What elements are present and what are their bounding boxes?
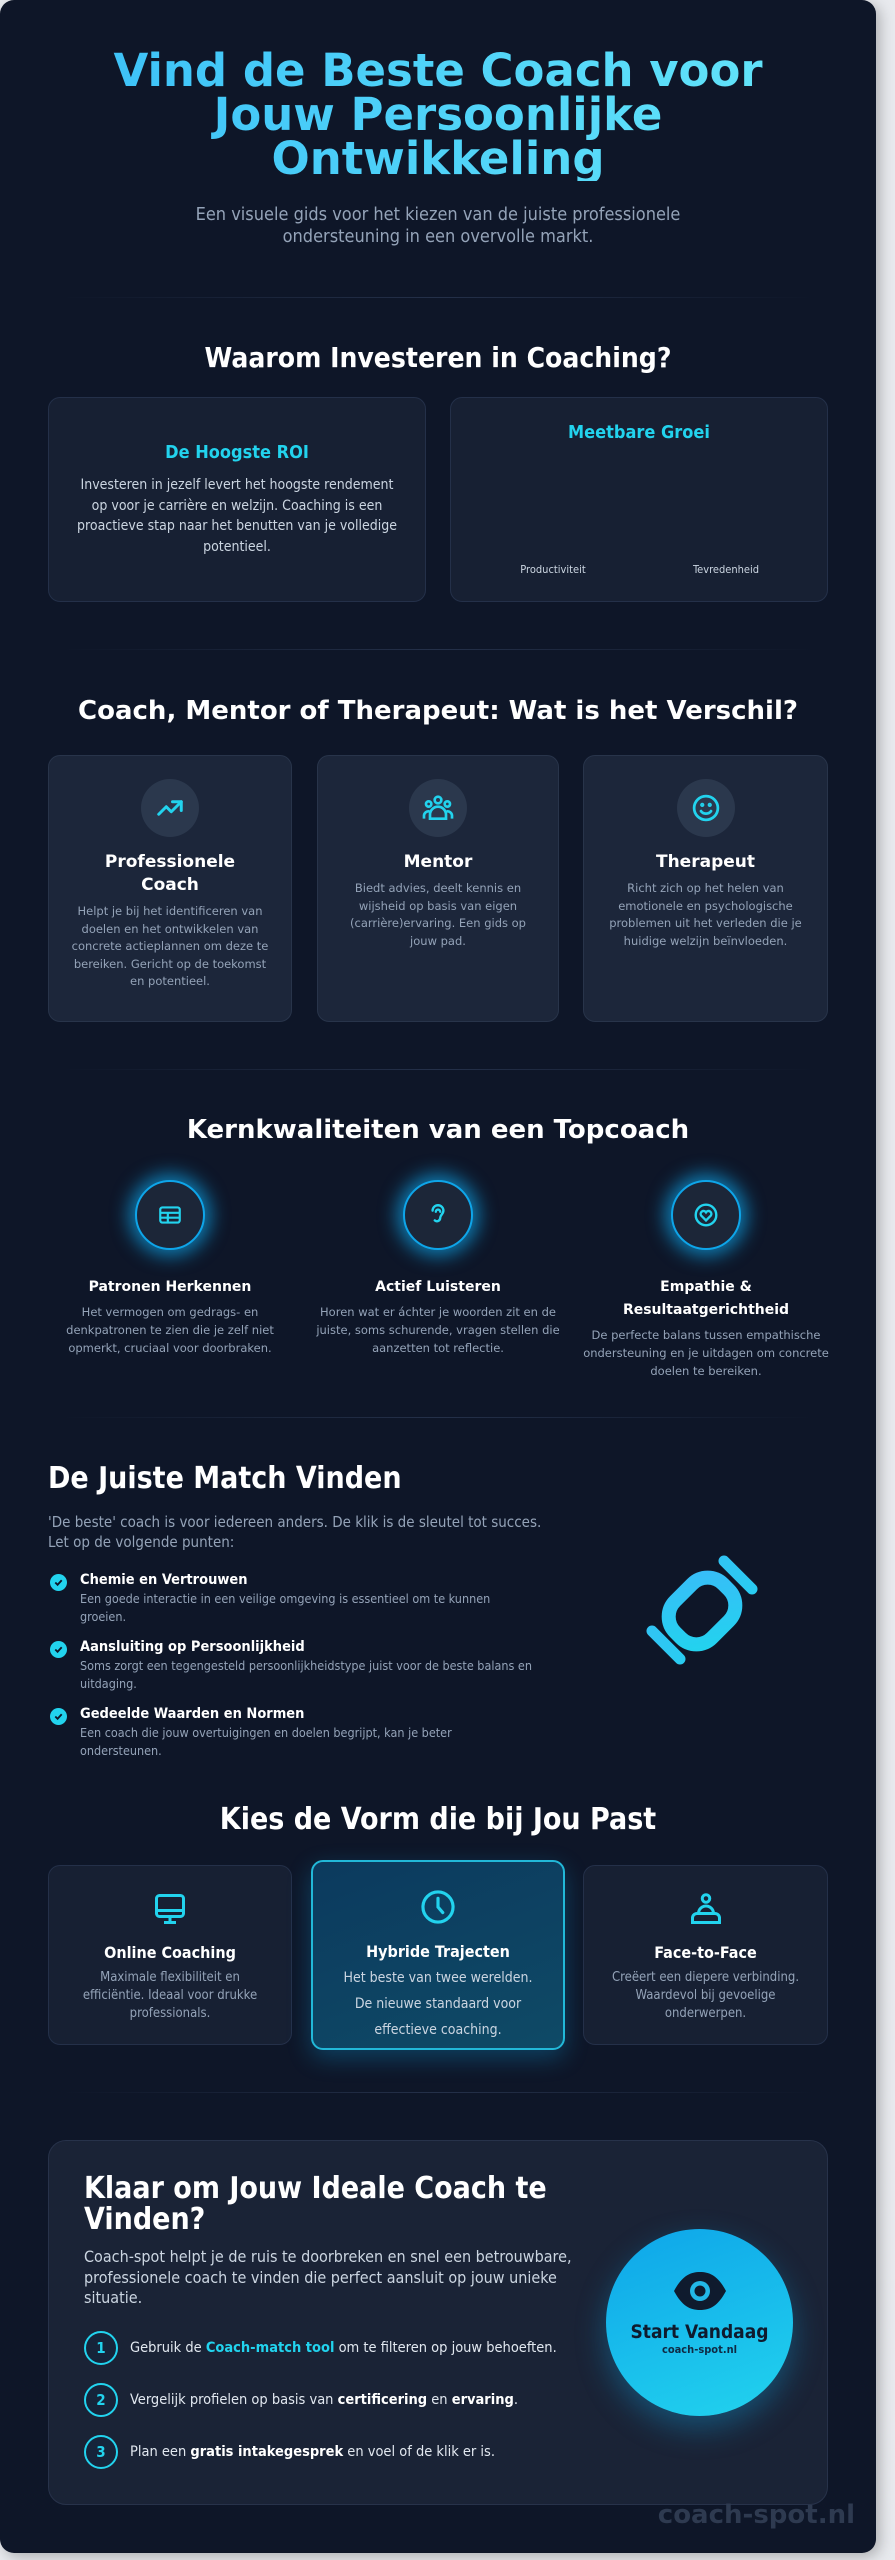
card title: ROI: De Hoogste ROI [165,442,309,463]
cta heading: Klaar om Jouw Ideale Coach te Vinden? [84,2171,547,2237]
card title [105,852,235,895]
quality text: Horen wat er áchter je woorden zit en de juiste, soms schurende, vragen stellen die aanzetten tot reflectie. [316,1305,560,1355]
title: Jouw Persoonlijke [214,88,662,141]
item: aansluiting: Soms zorgt een tegengesteld persoonlijkheidstype juist voor de beste balans en uitdaging. [80,1658,532,1691]
item: aansluiting [50,1639,532,1691]
title: Vind de Beste Coach voor [113,44,763,97]
item: chemie: Een goede interactie in een veilige omgeving is essentieel om te kunnen groeien. [80,1591,490,1624]
step 1: Gebruik de Coach-match tool om te filteren op jouw behoeften. [130,2340,557,2356]
card text: Richt zich op het helen van emotionele en psychologische problemen uit het verleden die je huidige welzijn beïnvloeden. [609,881,802,948]
panel: call to action [48,2140,828,2505]
panel: hybride trajecten: Hybride Trajecten [366,1942,510,1961]
panel: hybride trajecten: Het beste van twee werelden. De nieuwe standaard voor effectieve coaching. [344,1970,532,2038]
item: waarden: Een coach die jouw overtuigingen en doelen begrijpt, kan je beter ondersteunen. [80,1725,452,1758]
heading: coach mentor therapeut: Coach, Mentor of Therapeut: Wat is het Verschil? [78,696,798,726]
panel: meetbare groei chart [450,397,828,602]
icon: smile [676,779,734,837]
quality text: Het vermogen om gedrags- en denkpatronen te zien die je zelf niet opmerkt, cruciaal voor doorbraken. [66,1305,274,1355]
quality title: Patronen Herkennen [89,1279,251,1295]
panel: online coaching: Online Coaching [104,1943,236,1962]
button: start vandaag: coach-spot.nl [662,2343,737,2356]
subtitle: ondersteuning in een overvolle markt. [283,226,593,247]
icon: monitor [155,1894,185,1924]
card text: ROI: Investeren in jezelf levert het hoogste rendement op voor je carrière en welzijn. Coaching is een proactieve stap naar het benutten van je volledige potentieel. [77,477,397,554]
watermark: coach-spot.nl [658,2500,855,2530]
quality: patronen herkennen [66,1162,274,1355]
chart label: tevredenheid: Tevredenheid [693,563,759,576]
card text: Helpt je bij het identificeren van doelen en het ontwikkelen van concrete actieplannen om deze te bereiken. Gericht op de toekomst en potentieel. [72,904,268,988]
icon: heart [671,1180,741,1250]
icon: check [50,1708,67,1725]
title [0,49,876,181]
item: waarden [50,1706,452,1758]
heading: kernkwaliteiten: Kernkwaliteiten van een Topcoach [187,1115,689,1145]
quality title: Actief Luisteren [375,1279,501,1295]
icon: eye [674,2272,726,2310]
chart title: Meetbare Groei [568,422,710,443]
icon: trending up [141,779,199,837]
panel: mentor [317,755,559,1022]
panel: face-to-face: Creëert een diepere verbinding. Waardevol bij gevoelige onderwerpen. [612,1970,799,2021]
panel: professionele coach [48,755,292,1022]
quality: actief luisteren [316,1162,560,1355]
button: start vandaag [606,2229,793,2416]
item: waarden: Gedeelde Waarden en Normen [80,1706,304,1722]
quality title: Resultaatgerichtheid [623,1302,789,1318]
item: aansluiting: Aansluiting op Persoonlijkheid [80,1639,305,1655]
panel: hoogste ROI [48,397,426,602]
icon: clock [421,1890,455,1924]
cta text: Coach-spot helpt je de ruis te doorbreken en snel een betrouwbare, professionele coach te vinden die perfect aansluit op jouw unieke situatie. [84,2247,572,2307]
subtitle [196,204,680,247]
subtitle: Een visuele gids voor het kiezen van de juiste professionele [196,204,680,225]
icon: ear [403,1180,473,1250]
item: chemie [50,1572,490,1624]
quality title [623,1279,789,1318]
step 3: 3 [96,2443,106,2461]
icon: handshake link [646,1556,758,1664]
title: Ontwikkeling [271,132,605,185]
panel: therapeut [583,755,828,1022]
chart label: productiviteit: Productiviteit [520,563,586,576]
step 3: Plan een gratis intakegesprek en voel of de klik er is. [130,2444,495,2460]
icon: person [691,1893,721,1924]
icon: check [50,1641,67,1658]
heading: kies de vorm: Kies de Vorm die bij Jou Past [220,1802,656,1837]
step 3 [84,2435,495,2469]
quality title: Empathie & [660,1279,752,1295]
panel: online coaching [48,1865,292,2045]
step 2: Vergelijk profielen op basis van certificering en ervaring. [130,2392,518,2408]
step 1 [84,2331,557,2365]
panel: face-to-face: Face-to-Face [654,1943,757,1962]
step 2: 2 [96,2391,106,2409]
card title: Mentor [404,852,472,872]
intro text: 'De beste' coach is voor iedereen anders. De klik is de sleutel tot succes. Let op de volgende punten: [48,1513,541,1551]
panel: hybride trajecten [311,1860,565,2050]
card title: Professionele [105,852,235,872]
icon: group [409,779,467,837]
heading: waarom investeren: Waarom Investeren in Coaching? [205,341,671,374]
item: chemie: Chemie en Vertrouwen [80,1572,248,1588]
button: start vandaag: Start Vandaag [630,2321,768,2343]
quality text: De perfecte balans tussen empathische ondersteuning en je uitdagen om concrete doelen te bereiken. [583,1328,829,1378]
icon: table [135,1180,205,1250]
step 2 [84,2383,518,2417]
heading: juiste match: De Juiste Match Vinden [48,1461,402,1496]
card text: Biedt advies, deelt kennis en wijsheid op basis van eigen (carrière)ervaring. Een gids op jouw pad. [350,881,526,948]
panel: online coaching: Maximale flexibiliteit en efficiëntie. Ideaal voor drukke professionals. [83,1970,257,2021]
panel: face-to-face [583,1865,828,2045]
quality: empathie [583,1162,829,1378]
card title: Therapeut [656,852,755,872]
icon: check [50,1574,67,1591]
card title: Coach [141,875,199,895]
step 1: 1 [96,2339,106,2357]
